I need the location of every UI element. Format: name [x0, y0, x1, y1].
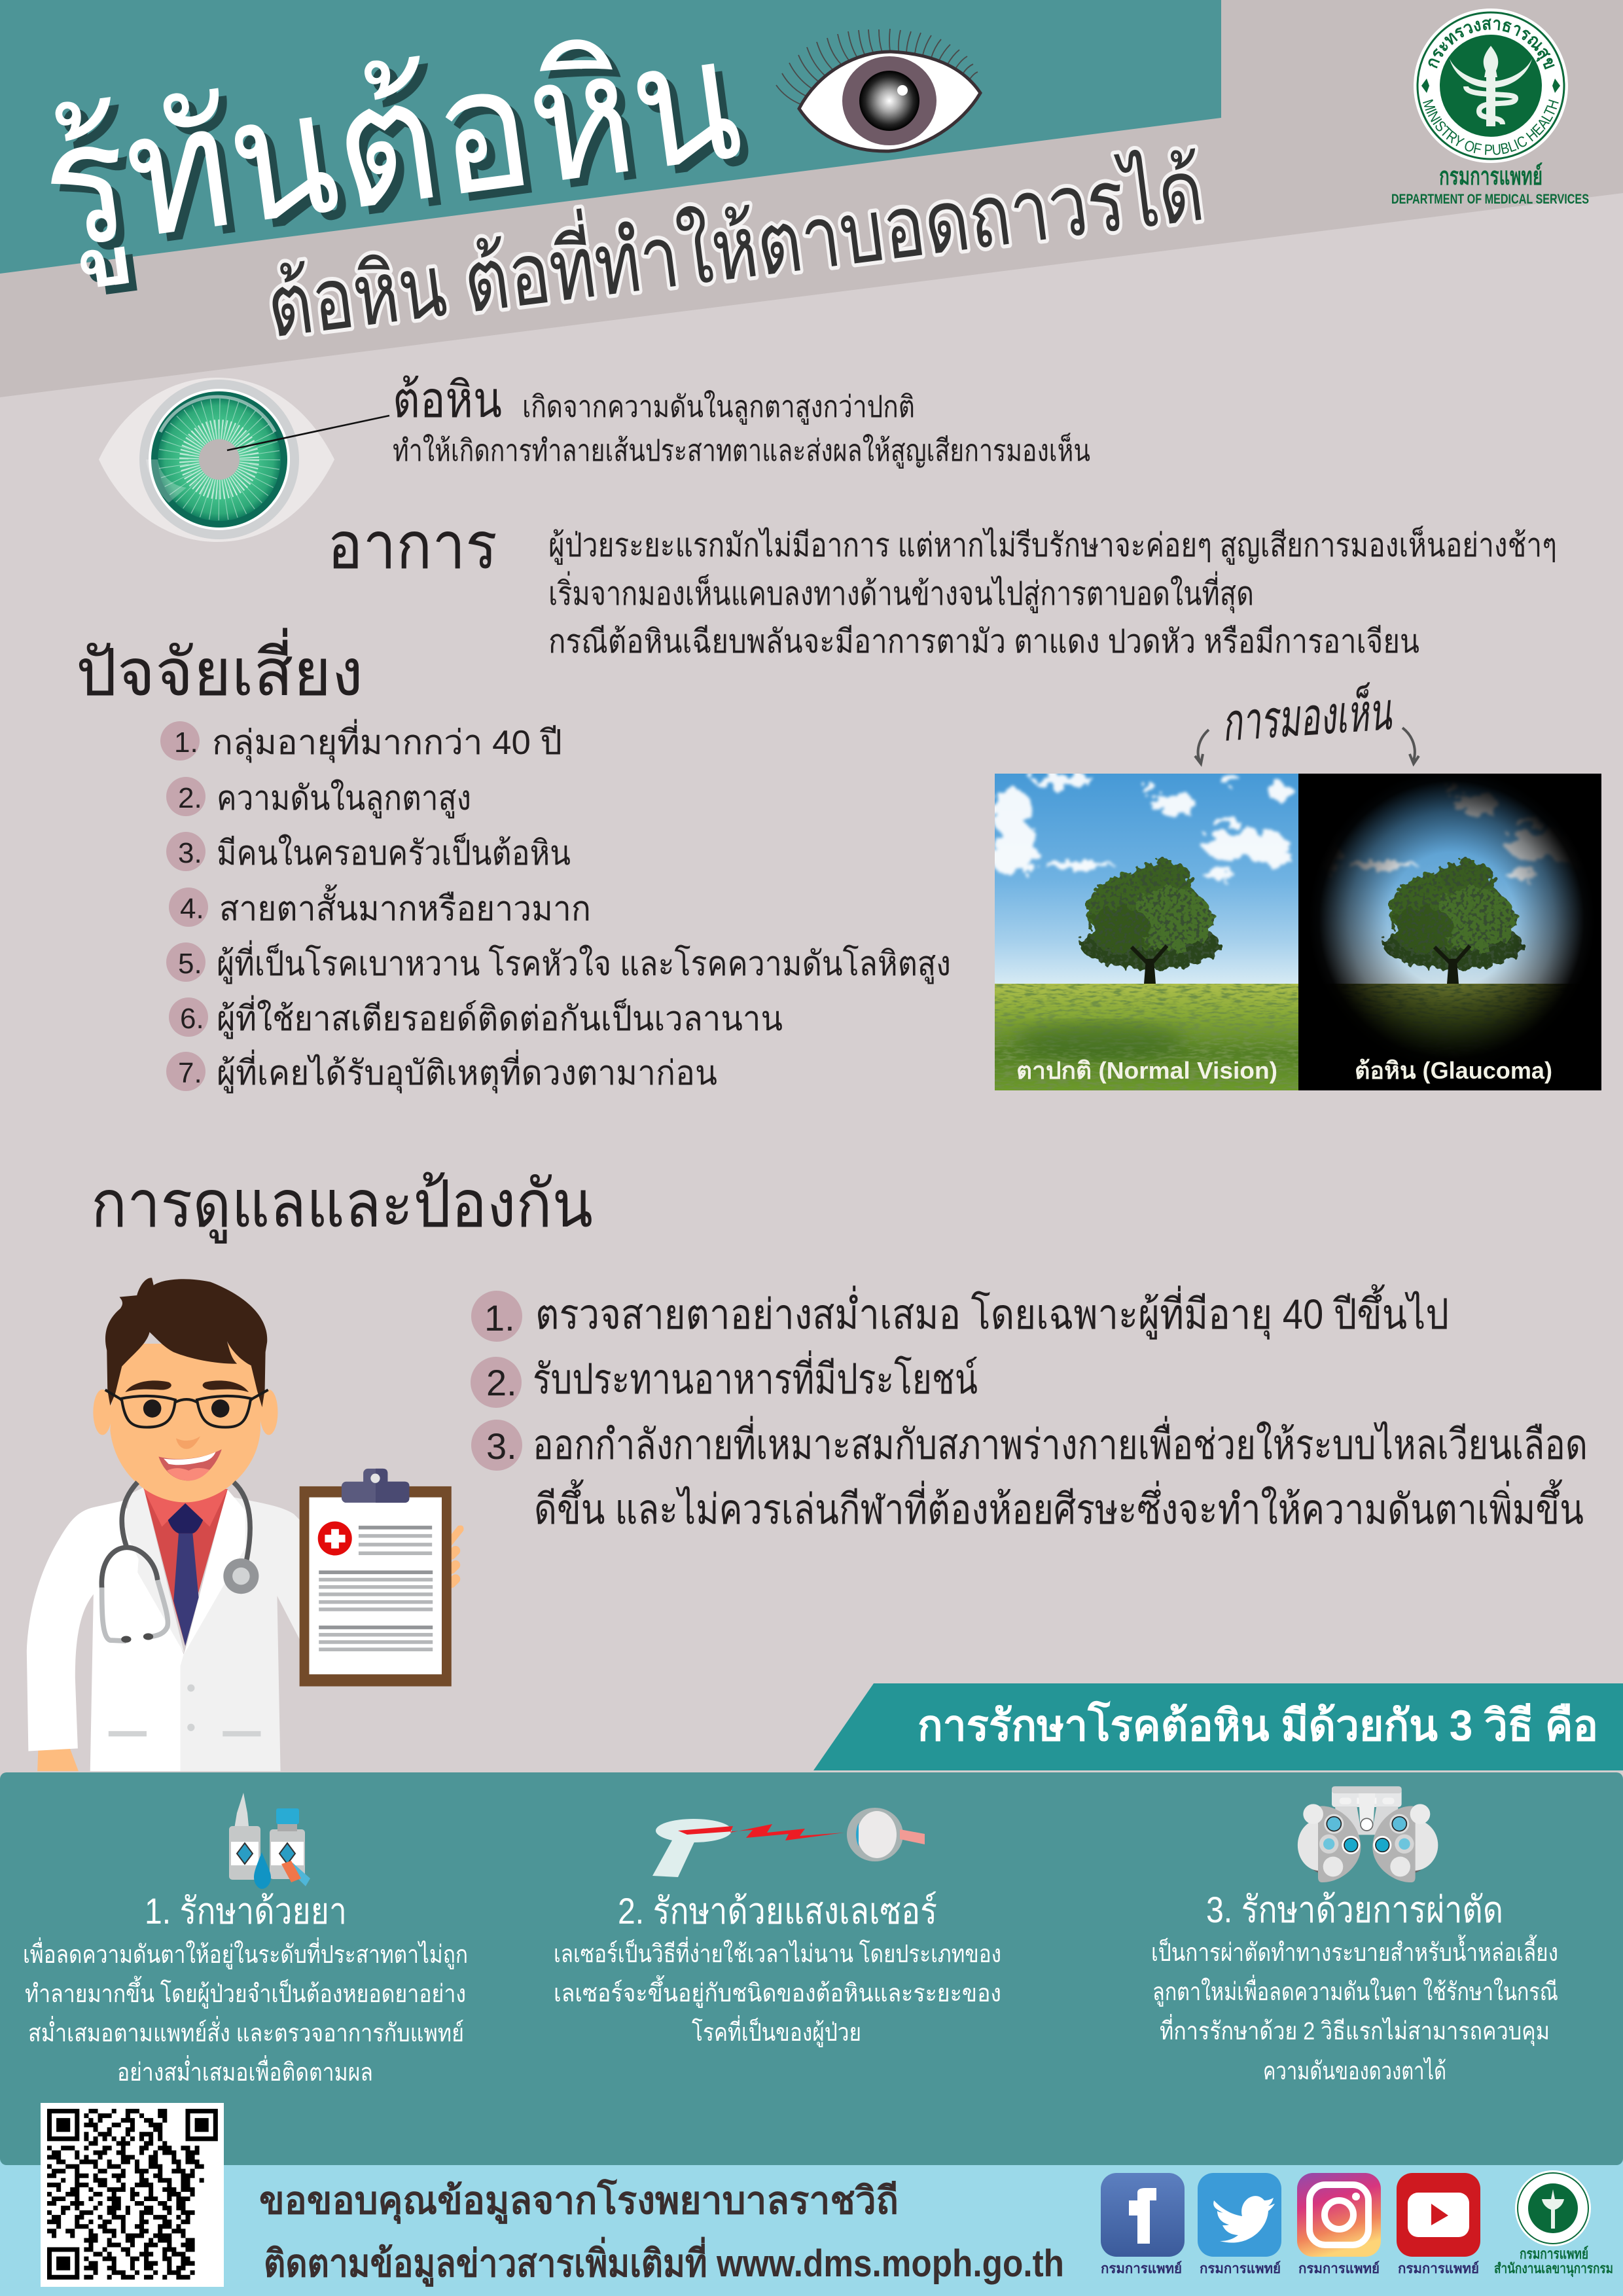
photo captions: [1016, 1057, 1552, 1084]
heading: risk factors: ปัจจัยเสี่ยง: [76, 628, 363, 709]
treatment 2: laser: เลเซอร์จะขึ้นอยู่กับชนิดของต้อหินและระยะของ: [554, 1975, 1001, 2008]
icon: twitter: [1198, 2173, 1281, 2276]
icon: glaucoma eye diagram: [99, 378, 389, 542]
prevention 3: 3.: [486, 1426, 517, 1467]
photo captions: ตาปกติ (Normal Vision): [1016, 1057, 1277, 1084]
logo: Ministry of Public Health seal: [1414, 9, 1568, 163]
icon: instagram: กรมการแพทย์: [1298, 2261, 1380, 2276]
risk 7: 7.: [178, 1057, 202, 1089]
risk 3: มีคนในครอบครัวเป็นต้อหิน: [217, 833, 571, 872]
icon: youtube: กรมการแพทย์: [1398, 2261, 1479, 2276]
subtitle: ต้อหิน ต้อที่ทำให้ตาบอดถาวรได้: [260, 131, 1209, 355]
symptoms text: เริ่มจากมองเห็นแคบลงทางด้านข้างจนไปสู่การตาบอดในที่สุด: [548, 571, 1254, 613]
icon: eye with lashes: [776, 29, 980, 151]
logo text: department name: [1391, 162, 1589, 207]
risk 3: 3.: [178, 837, 202, 869]
treatment 1: medication: เพื่อลดความดันตาให้อยู่ในระดับที่ประสาทตาไม่ถูก: [23, 1937, 468, 1969]
risk 7: ผู้ที่เคยได้รับอุบัติเหตุที่ดวงตามาก่อน: [217, 1049, 717, 1094]
symptoms text: [548, 526, 1557, 660]
risk 6: ผู้ที่ใช้ยาสเตียรอยด์ติดต่อกันเป็นเวลานาน: [217, 995, 783, 1039]
icon: youtube: [1397, 2173, 1480, 2276]
treatment 1: medication: 1. รักษาด้วยยา: [145, 1890, 347, 1931]
treatment 2: laser: 2. รักษาด้วยแสงเลเซอร์: [618, 1890, 937, 1931]
logo text: department name: กรมการแพทย์: [1439, 162, 1543, 190]
treatment 2: laser: โรคที่เป็นของผู้ป่วย: [692, 2015, 861, 2047]
risk 4: 4.: [180, 893, 204, 925]
symptoms text: กรณีต้อหินเฉียบพลันจะมีอาการตามัว ตาแดง ปวดหัว หรือมีการอาเจียน: [548, 623, 1419, 660]
banner: teal header: [0, 0, 1221, 274]
panel: normal vision photo: [991, 774, 1298, 1090]
definition text: เกิดจากความดันในลูกตาสูงกว่าปกติ: [522, 389, 915, 425]
illustration: doctor with clipboard: [27, 1278, 463, 1771]
risk 2: ความดันในลูกตาสูง: [217, 779, 471, 819]
treatment 3: surgery: [1151, 1786, 1558, 2085]
footer text: ขอขอบคุณข้อมูลจากโรงพยาบาลราชวิถี: [259, 2178, 899, 2225]
icon: instagram: [1297, 2173, 1381, 2276]
treatment 2: laser: [554, 1808, 1001, 2047]
treatment 1: medication: ทำลายมากขึ้น โดยผู้ป่วยจำเป็นต้องหยอดยาอย่าง: [25, 1975, 466, 2009]
treatment 1: medication: [23, 1793, 468, 2087]
definition text: ต้อหิน: [393, 372, 502, 428]
icon: facebook: [1101, 2173, 1185, 2276]
title: รู้ทันต้อหิน: [39, 9, 760, 300]
banner: treatment heading: การรักษาโรคต้อหิน มีด้วยกัน 3 วิธี คือ: [918, 1700, 1598, 1749]
definition text: ทำให้เกิดการทำลายเส้นประสาทตาและส่งผลให้สูญเสียการมองเห็น: [393, 433, 1090, 469]
arrow: left: [1195, 730, 1209, 764]
footer background: [0, 2153, 1623, 2296]
handwritten label: vision: การมองเห็น: [1220, 681, 1394, 752]
footer text: [259, 2178, 1064, 2287]
prevention 3: [471, 1416, 1588, 1533]
treatment 1: medication: อย่างสม่ำเสมอเพื่อติดตามผล: [117, 2055, 373, 2087]
risk 1: 1.: [174, 726, 198, 759]
banner: treatment heading: [813, 1683, 1623, 1770]
icon: phoropter: [1298, 1786, 1438, 1882]
treatment 3: surgery: ที่การรักษาด้วย 2 วิธีแรกไม่สามารถควบคุม: [1160, 2014, 1550, 2046]
logo: small seal: [1494, 2170, 1613, 2278]
icon: laser and eye: [652, 1808, 925, 1877]
risk 2: [166, 777, 471, 819]
treatment 2: laser: เลเซอร์เป็นวิธีที่ง่ายใช้เวลาไม่นาน โดยประเภทของ: [554, 1937, 1001, 1968]
risk 4: สายตาสั้นมากหรือยาวมาก: [219, 884, 591, 928]
arrow: right: [1402, 728, 1419, 764]
icon: twitter: กรมการแพทย์: [1200, 2261, 1281, 2276]
logo: Ministry of Public Health seal: กระทรวงสาธารณสุข: [1428, 18, 1555, 69]
prevention 2: รับประทานอาหารที่มีประโยชน์: [533, 1350, 978, 1403]
icon: eye drops: [229, 1793, 310, 1889]
heading: symptoms: อาการ: [327, 509, 497, 583]
logo: small seal: กรมการแพทย์: [1520, 2246, 1588, 2262]
logo: Ministry of Public Health seal: MINISTRY OF PUBLIC HEALTH: [1423, 99, 1559, 155]
risk 5: ผู้ที่เป็นโรคเบาหวาน โรคหัวใจ และโรคความดันโลหิตสูง: [217, 940, 951, 984]
icon: facebook: กรมการแพทย์: [1101, 2261, 1182, 2276]
photo captions: ต้อหิน (Glaucoma): [1355, 1057, 1552, 1084]
risk 1: กลุ่มอายุที่มากกว่า 40 ปี: [212, 719, 562, 763]
list: risk factors: [160, 719, 951, 1094]
risk 2: 2.: [178, 782, 202, 814]
QR code: [41, 2103, 224, 2287]
panel: treatments: [0, 1772, 1623, 2165]
heading: care and prevention: การดูแลและป้องกัน: [91, 1168, 593, 1244]
definition text: [393, 372, 1090, 469]
prevention 1: [471, 1284, 1449, 1342]
prevention 1: 1.: [484, 1297, 515, 1338]
title: รู้ทันต้อหิน: [31, 2, 752, 293]
risk 6: 6.: [180, 1003, 204, 1035]
list: prevention: [471, 1284, 1588, 1533]
footer text: ติดตามข้อมูลข่าวสารเพิ่มเติมที่ www.dms.moph.go.th: [264, 2236, 1064, 2287]
prevention 2: 2.: [486, 1362, 517, 1403]
treatment 3: surgery: ความดันของดวงตาได้: [1263, 2057, 1446, 2085]
treatment 3: surgery: 3. รักษาด้วยการผ่าตัด: [1206, 1889, 1503, 1930]
prevention 2: [471, 1350, 978, 1408]
prevention 1: ตรวจสายตาอย่างสม่ำเสมอ โดยเฉพาะผู้ที่มีอายุ 40 ปีขึ้นไป: [535, 1284, 1449, 1340]
panel: glaucoma vision photo: [1294, 774, 1601, 1090]
treatment 1: medication: สม่ำเสมอตามแพทย์สั่ง และตรวจอาการกับแพทย์: [28, 2016, 464, 2047]
risk 5: 5.: [178, 948, 202, 980]
